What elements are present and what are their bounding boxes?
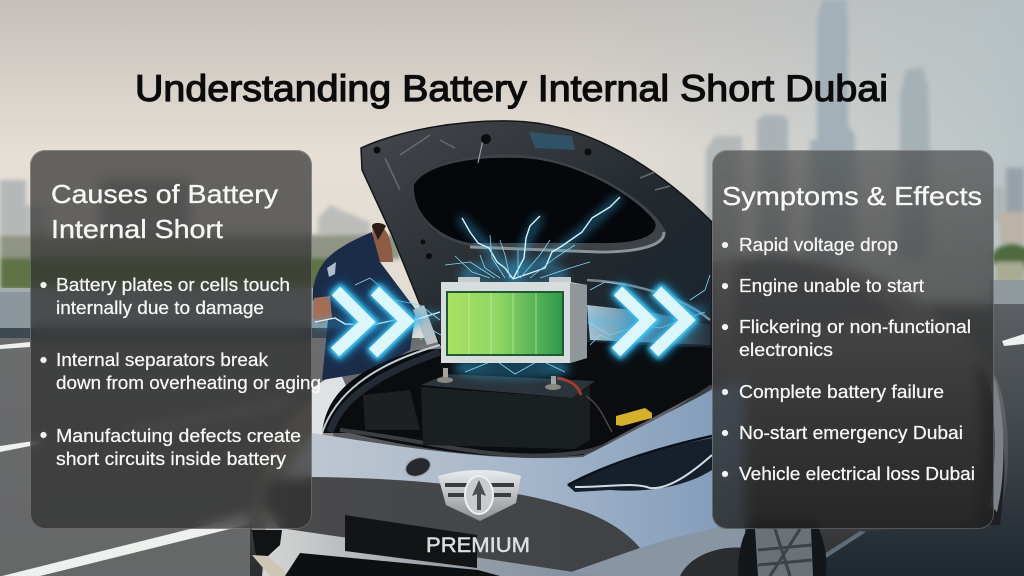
cause 1 [40, 274, 290, 318]
panel: symptoms [712, 150, 994, 529]
small badge [403, 454, 433, 480]
lightning arcs [315, 197, 710, 374]
symptoms heading: Symptoms & Effects [722, 181, 982, 211]
causes heading [51, 179, 278, 244]
floating battery icon [441, 277, 587, 363]
headlight [567, 438, 712, 492]
road markings [0, 334, 1024, 576]
cause 2 [40, 349, 321, 393]
sky [0, 0, 1024, 340]
title: Understanding Battery Internal Short Dubai [135, 68, 888, 109]
symptom 3 [722, 316, 971, 360]
licence plate [345, 515, 477, 568]
cause 3: Manufactuing defects create [56, 425, 301, 446]
symptom 3: Flickering or non-functional [739, 316, 971, 337]
rear wheel [975, 360, 1004, 525]
road [0, 304, 1024, 576]
cause 3 [40, 425, 301, 469]
chevrons left [334, 289, 407, 355]
engine bay [322, 342, 712, 457]
premium label: PREMIUM [426, 534, 530, 557]
skyline [0, 0, 1024, 260]
car battery [421, 368, 652, 449]
technician [313, 223, 416, 380]
symptom 5: No-start emergency Dubai [739, 422, 963, 443]
cause 3: short circuits inside battery [56, 448, 287, 469]
panel: causes [30, 150, 312, 529]
front wheel [738, 520, 827, 576]
symptom 6: Vehicle electrical loss Dubai [739, 463, 975, 484]
shield emblem [438, 470, 521, 521]
open hood [361, 121, 712, 380]
cause 2: Internal separators break [56, 349, 269, 370]
chevrons right [615, 289, 688, 354]
cause 1: Battery plates or cells touch [56, 274, 290, 295]
road barrier [0, 280, 1024, 338]
car nose [252, 380, 745, 576]
symptom 2: Engine unable to start [739, 275, 924, 296]
sill highlight [818, 531, 866, 562]
causes heading: Causes of Battery [51, 179, 278, 209]
symptom 4: Complete battery failure [739, 381, 944, 402]
car body [250, 255, 1008, 576]
bumper band [262, 477, 640, 576]
trees [0, 235, 1024, 290]
causes heading: Internal Short [51, 214, 224, 244]
symptom 1: Rapid voltage drop [739, 234, 898, 255]
symptom 3: electronics [739, 339, 833, 360]
car windows [735, 258, 905, 352]
cause 2: down from overheating or aging [56, 372, 321, 393]
cause 1: internally due to damage [56, 297, 264, 318]
